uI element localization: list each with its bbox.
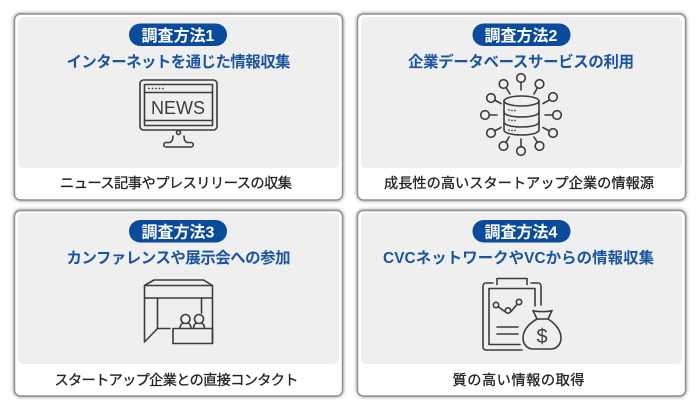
caption: method 4: 質の高い情報の取得 (452, 372, 584, 389)
panel: method 1 (14, 14, 342, 200)
heading: method 4: CVCネットワークやVCからの情報収集 (383, 248, 655, 267)
badge: method 4 (472, 220, 570, 242)
icon: clipboard and money bag: $ (536, 326, 548, 348)
badge: method 4: 調査方法4 (485, 222, 558, 242)
heading: method 3: カンファレンスや展示会への参加 (66, 249, 290, 267)
caption: method 2: 成長性の高いスタートアップ企業の情報源 (384, 175, 654, 192)
panel: method 2 (358, 14, 686, 200)
icon: clipboard and money bag (483, 278, 561, 350)
heading: method 1: インターネットを通じた情報収集 (66, 52, 291, 71)
panel: method 4 (358, 210, 686, 396)
badge: method 1 (129, 24, 227, 46)
icon: database network (481, 74, 561, 155)
badge: method 2 (472, 24, 570, 46)
heading: method 2: 企業データベースサービスの利用 (408, 52, 634, 71)
icon: exhibition booth (144, 280, 212, 344)
panel: method 3 (14, 210, 342, 396)
caption: method 1: ニュース記事やプレスリリースの収集 (60, 176, 292, 192)
badge: method 1: 調査方法1 (142, 26, 215, 45)
badge: method 3 (129, 220, 227, 242)
icon: news monitor (140, 80, 217, 147)
badge: method 2: 調査方法2 (485, 26, 558, 45)
badge: method 3: 調査方法3 (142, 222, 215, 242)
caption: method 3: スタートアップ企業との直接コンタクト (54, 373, 298, 389)
icon: news monitor: NEWS (151, 98, 205, 118)
